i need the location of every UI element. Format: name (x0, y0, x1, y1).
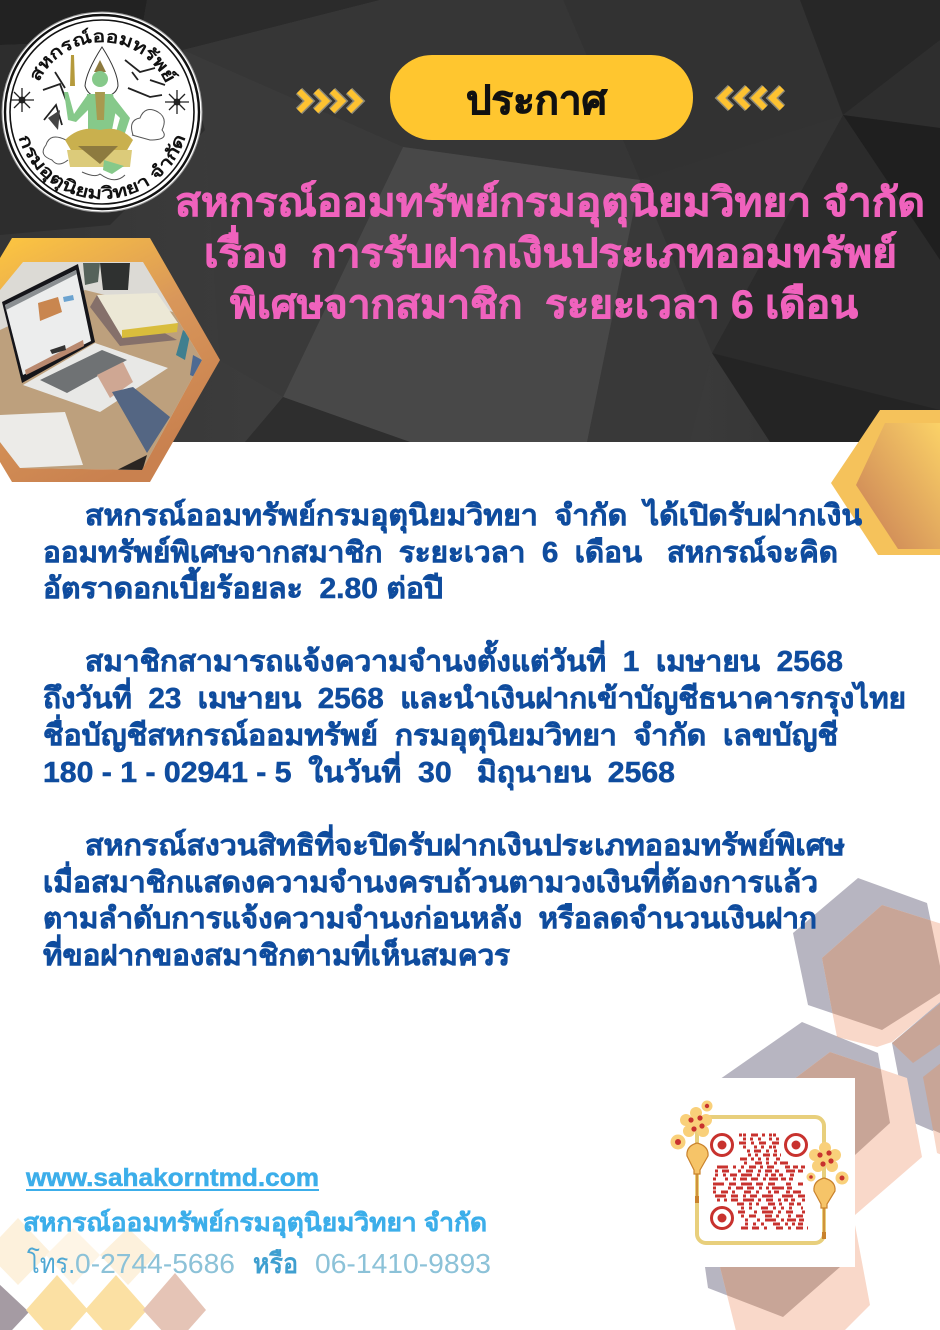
website link: www.sahakorntmd.com (25, 1164, 319, 1192)
title: พิเศษจากสมาชิก ระยะเวลา 6 เดือน (230, 283, 858, 327)
icon: left chevrons (299, 91, 359, 111)
phone numbers: โทร. (27, 1247, 75, 1279)
panel: dark header background (0, 0, 940, 442)
heading pill: announcement: ประกาศ (466, 79, 608, 123)
organisation name: สหกรณ์ออมทรัพย์กรมอุตุนิยมวิทยา จำกัด (23, 1208, 487, 1239)
text block: paragraph 3: เมื่อสมาชิกแสดงความจำนงครบถ้วนตามวงเงินที่ต้องการแล้ว (43, 861, 818, 899)
text block: paragraph 1: สหกรณ์ออมทรัพย์กรมอุตุนิยมวิทยา จำกัด ได้เปิดรับฝากเงิน (85, 498, 862, 533)
text block: paragraph 2: 180 - 1 - 02941 - 5 ในวันที่ 30 มิถุนายน 2568 (43, 751, 675, 790)
seal lettering: กรมอุตุนิยมวิทยา จำกัด (18, 136, 186, 200)
text block: paragraph 1: ออมทรัพย์พิเศษจากสมาชิก ระยะเวลา 6 เดือน สหกรณ์จะคิด (43, 535, 838, 569)
phone numbers: 06-1410-9893 (315, 1248, 491, 1279)
text block: paragraph 2: ชื่อบัญชีสหกรณ์ออมทรัพย์ กรมอุตุนิยมวิทยา จำกัด เลขบัญชี (43, 714, 838, 753)
title: เรื่อง การรับฝากเงินประเภทออมทรัพย์ (204, 225, 897, 276)
QR code with lantern frame (670, 1100, 848, 1243)
phone numbers: 0-2744-5686 (75, 1248, 235, 1279)
icon: right chevrons (721, 88, 782, 108)
phone numbers (27, 1247, 491, 1279)
clouds and lightning (43, 60, 165, 180)
lantern and blossoms, left (670, 1100, 712, 1203)
title: สหกรณ์ออมทรัพย์กรมอุตุนิยมวิทยา จำกัด (175, 180, 925, 228)
text block: paragraph 3: ตามลำดับการแจ้งความจำนงก่อนหลัง หรือลดจำนวนเงินฝาก (43, 903, 817, 935)
text block: paragraph 2: สมาชิกสามารถแจ้งความจำนงตั้งแต่วันที่ 1 เมษายน 2568 (85, 639, 843, 678)
text block: paragraph 3 (43, 824, 845, 972)
QR modules (713, 1135, 808, 1228)
phone numbers: หรือ (253, 1248, 298, 1279)
text block: paragraph 3: ที่ขอฝากของสมาชิกตามที่เห็นสมควร (43, 934, 510, 972)
seal lettering (18, 27, 186, 200)
panel: lower right hexagon decoration (690, 878, 940, 1330)
title (175, 180, 925, 327)
seal lettering: สหกรณ์ออมทรัพย์ (32, 27, 180, 83)
heading pill: announcement (390, 55, 693, 140)
icon: orange hexagon accent, top right (831, 410, 940, 555)
text block: paragraph 2: ถึงวันที่ 23 เมษายน 2568 และนำเงินฝากเข้าบัญชีธนาคารกรุงไทย (43, 677, 906, 716)
QR finder rings (712, 1134, 806, 1228)
text block: paragraph 1 (43, 498, 862, 605)
deity figure (64, 47, 133, 174)
icon: cooperative round seal logo (2, 12, 202, 212)
illustration: hexagon framed laptop photo (0, 238, 220, 482)
text block: paragraph 3: สหกรณ์สงวนสิทธิที่จะปิดรับฝากเงินประเภทออมทรัพย์พิเศษ (85, 824, 845, 862)
text block: paragraph 2 (43, 639, 906, 790)
lantern and blossoms, right (806, 1142, 848, 1239)
seal side stars (10, 88, 189, 114)
panel: lower left chevron decoration (0, 1218, 206, 1330)
text block: paragraph 1: อัตราดอกเบี้ยร้อยละ 2.80 ต่อปี (43, 566, 443, 605)
